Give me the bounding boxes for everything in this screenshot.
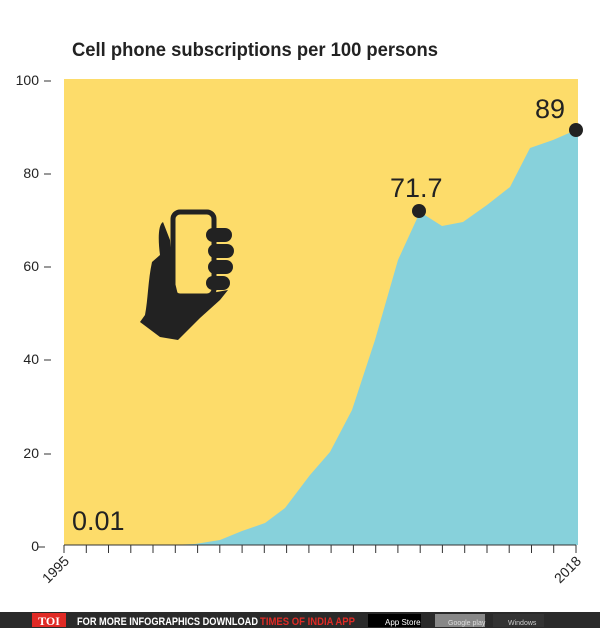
y axis labels: 60 bbox=[23, 258, 39, 274]
y axis labels: 20 bbox=[23, 445, 39, 461]
footer bar: Google play bbox=[448, 620, 486, 627]
x axis labels: 2018 bbox=[551, 553, 584, 586]
x axis labels bbox=[39, 553, 584, 586]
chart: area chart bbox=[64, 79, 578, 553]
footer bar: TIMES OF INDIA APP bbox=[260, 616, 355, 628]
y axis labels: 40 bbox=[23, 351, 39, 367]
x axis line and ticks bbox=[64, 545, 576, 553]
value label 71.7 with dot: 71.7 bbox=[390, 173, 443, 203]
value label 89 with dot bbox=[535, 94, 583, 137]
data area bbox=[64, 130, 578, 545]
footer bar bbox=[0, 612, 600, 628]
footer bar: Windows bbox=[508, 620, 537, 627]
y axis labels bbox=[16, 72, 39, 554]
value label 89 with dot: 89 bbox=[535, 94, 565, 124]
footer bar: App Store bbox=[385, 618, 421, 627]
y axis labels: 0 bbox=[31, 538, 39, 554]
footer bar: TOI bbox=[38, 614, 60, 628]
footer bar: FOR MORE INFOGRAPHICS DOWNLOAD bbox=[77, 616, 258, 628]
icon: hand holding phone bbox=[140, 212, 234, 340]
background area bbox=[64, 79, 578, 545]
value label 71.7 with dot bbox=[390, 173, 443, 218]
value label 0.01: 0.01 bbox=[72, 506, 125, 536]
title: Cell phone subscriptions per 100 persons bbox=[72, 40, 438, 61]
y axis labels: 80 bbox=[23, 165, 39, 181]
y axis labels: 100 bbox=[16, 72, 39, 88]
x axis labels: 1995 bbox=[39, 553, 72, 586]
